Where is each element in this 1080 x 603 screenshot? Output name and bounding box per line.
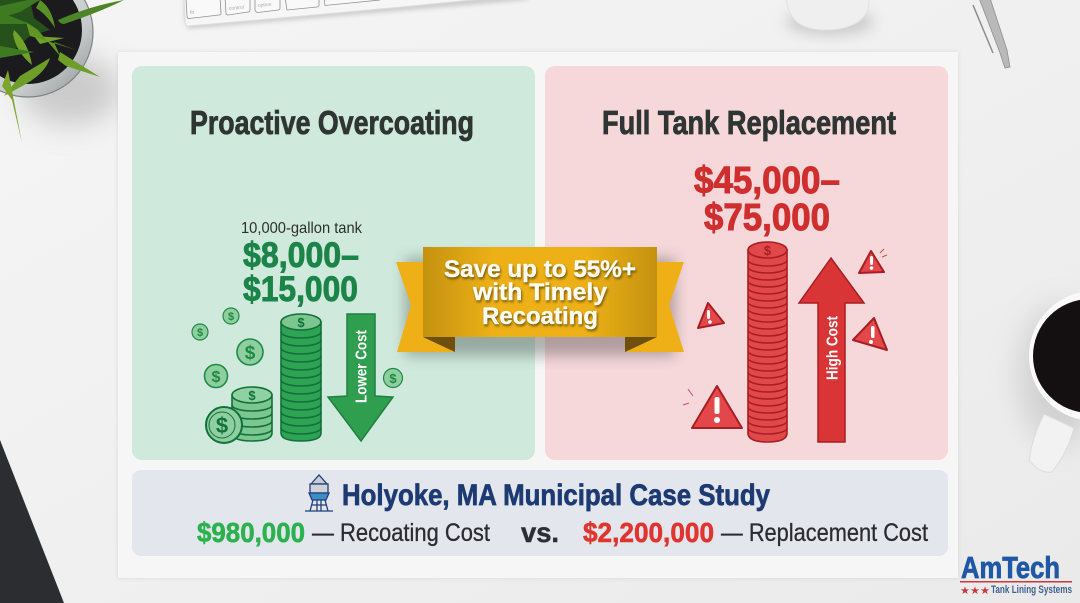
red price range: $75,000 bbox=[704, 197, 830, 239]
green price range bbox=[243, 236, 359, 309]
arrow: lower cost bbox=[328, 314, 393, 441]
replacement cost: $2,200,000 bbox=[583, 517, 714, 548]
green price range: $15,000 bbox=[243, 270, 358, 309]
paper sheet bbox=[118, 52, 958, 578]
red price range bbox=[694, 160, 840, 239]
icon: tall green coin stack: $ bbox=[297, 315, 305, 330]
right ribbon tail bbox=[625, 262, 684, 352]
icon: water tower bbox=[305, 475, 333, 511]
panel: full tank replacement bbox=[545, 66, 948, 460]
arrow: lower cost: Lower Cost bbox=[354, 329, 370, 403]
heading: Full Tank Replacement bbox=[602, 104, 896, 141]
panel: proactive overcoating bbox=[132, 66, 535, 460]
potted plant bbox=[0, 0, 124, 143]
mouse bbox=[786, 0, 874, 35]
left ribbon tail bbox=[396, 262, 455, 352]
arrow: high cost bbox=[799, 258, 864, 442]
tank size label: 10,000-gallon tank bbox=[241, 220, 363, 237]
red price range: $45,000– bbox=[694, 160, 840, 202]
ribbon text: with Timely bbox=[472, 279, 608, 306]
icon: large front coin: $ bbox=[216, 413, 228, 438]
ribbon text bbox=[444, 256, 636, 330]
coffee cup bbox=[1018, 291, 1080, 472]
recoating cost: $980,000 bbox=[197, 517, 305, 548]
icon: short green coin stack: $ bbox=[248, 388, 256, 403]
icon: loose coins: $ bbox=[389, 371, 397, 386]
icon: loose coins: $ bbox=[212, 369, 221, 386]
icon: short green coin stack bbox=[232, 387, 272, 441]
logo: AmTech: ★★★ bbox=[960, 585, 991, 597]
keyboard: option bbox=[258, 2, 272, 9]
recoating cost: — Recoating Cost bbox=[312, 519, 490, 547]
versus: vs. bbox=[521, 517, 559, 548]
keyboard bbox=[184, 0, 530, 29]
icon: tall red coin stack: $ bbox=[764, 243, 772, 258]
ribbon text: Save up to 55%+ bbox=[444, 256, 636, 283]
panel: case study bbox=[132, 470, 948, 556]
logo: AmTech: AmTech bbox=[961, 550, 1060, 585]
replacement cost: — Replacement Cost bbox=[721, 519, 928, 547]
icon: tall red coin stack bbox=[748, 242, 787, 442]
dark desk corner bbox=[0, 440, 64, 603]
heading: Proactive Overcoating bbox=[190, 104, 474, 141]
keyboard: control bbox=[229, 5, 244, 12]
callout ribbon: savings bbox=[396, 247, 684, 356]
case study heading: Holyoke, MA Municipal Case Study bbox=[342, 479, 770, 512]
ribbon folds bbox=[423, 337, 657, 352]
replacement cost bbox=[583, 517, 928, 548]
icon: loose coins: $ bbox=[228, 311, 234, 323]
icon: loose coins bbox=[192, 308, 402, 388]
ribbon body bbox=[423, 247, 657, 337]
pen bbox=[973, 0, 1010, 68]
icon: loose coins: $ bbox=[245, 343, 256, 364]
icon: warning triangles bbox=[683, 249, 887, 428]
keyboard: fn bbox=[190, 10, 194, 16]
arrow: high cost: High Cost bbox=[824, 315, 842, 380]
icon: large front coin bbox=[206, 407, 242, 443]
icon: loose coins: $ bbox=[197, 327, 203, 339]
green price range: $8,000– bbox=[243, 236, 359, 275]
ribbon text: Recoating bbox=[482, 303, 598, 330]
icon: tall green coin stack bbox=[281, 314, 321, 441]
recoating cost bbox=[197, 517, 490, 548]
